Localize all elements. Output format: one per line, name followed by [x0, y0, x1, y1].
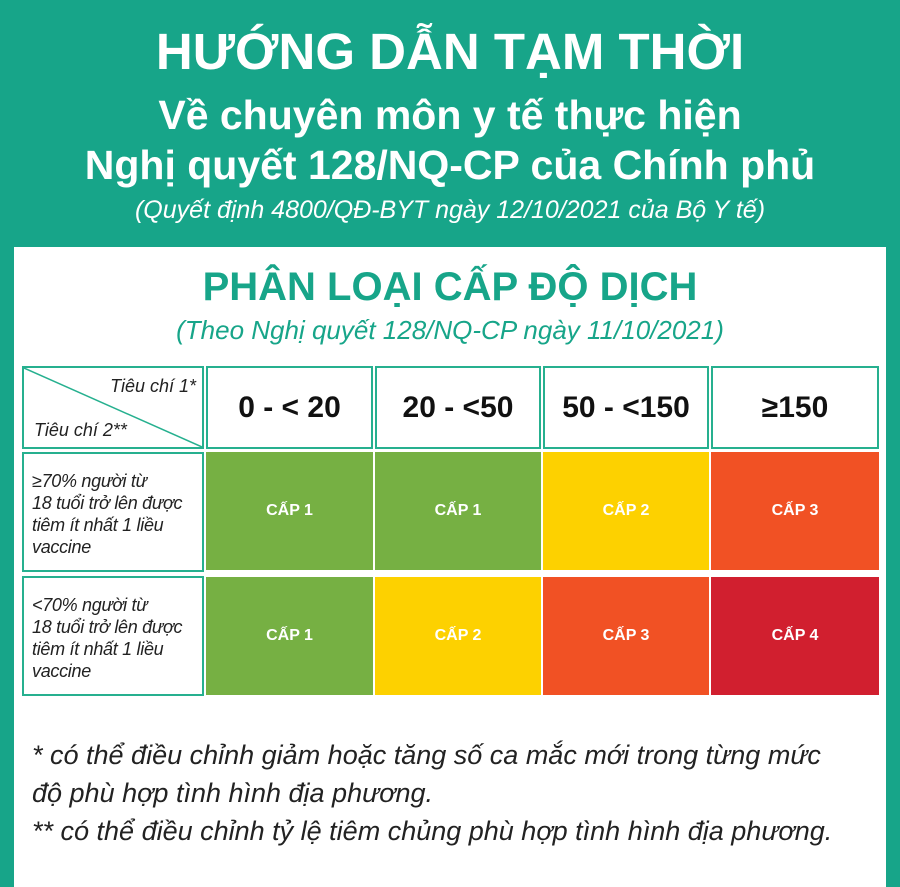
row 2 levels: CẤP 3: [603, 627, 649, 644]
row label 1: vaccine: [32, 537, 91, 557]
panel: classification: [14, 247, 886, 887]
header: 0-<20: 0 - < 20: [238, 390, 341, 424]
corner cell: Tiêu chí 2**: [34, 420, 127, 440]
row label 2: tiêm ít nhất 1 liều: [32, 639, 163, 659]
subtitle: Nghị quyết 128/NQ-CP của Chính phủ: [85, 142, 815, 188]
row label 1: tiêm ít nhất 1 liều: [32, 515, 163, 535]
table: [22, 366, 879, 696]
row label 1: ≥70% người từ: [32, 471, 147, 491]
header: 50-<150: [543, 366, 709, 449]
subtitle: [85, 92, 815, 188]
header: 50-<150: 50 - <150: [562, 390, 690, 424]
row 1 levels: CẤP 3: [772, 502, 818, 519]
corner cell: Tiêu chí 1*: [110, 376, 196, 396]
subtitle: Về chuyên môn y tế thực hiện: [158, 92, 742, 138]
header: >=150: [711, 366, 879, 449]
row 1 levels: CẤP 1: [435, 502, 481, 519]
row 1 levels: CẤP 2: [603, 502, 649, 519]
footnotes: [32, 740, 832, 846]
header: >=150: ≥150: [762, 390, 828, 424]
footnotes: * có thể điều chỉnh giảm hoặc tăng số ca mắc mới trong từng mức: [32, 740, 821, 770]
header: 20-<50: 20 - <50: [403, 390, 513, 424]
panel heading: PHÂN LOẠI CẤP ĐỘ DỊCH: [203, 265, 697, 309]
row label 2: <70% người từ: [32, 595, 147, 615]
source note: (Quyết định 4800/QĐ-BYT ngày 12/10/2021 của Bộ Y tế): [135, 196, 765, 224]
panel subheading: (Theo Nghị quyết 128/NQ-CP ngày 11/10/2021): [176, 315, 724, 345]
row label 2: 18 tuổi trở lên được: [32, 617, 182, 637]
footnotes: ** có thể điều chỉnh tỷ lệ tiêm chủng phù hợp tình hình địa phương.: [32, 816, 832, 846]
row 1 levels: CẤP 1: [266, 502, 313, 519]
row 2 levels: CẤP 4: [772, 627, 818, 644]
header: 0-<20: [206, 366, 373, 449]
row 1 levels: [206, 452, 879, 570]
row label 2: vaccine: [32, 661, 91, 681]
row label 1: [22, 452, 204, 572]
header: 20-<50: [375, 366, 541, 449]
row label 1: 18 tuổi trở lên được: [32, 493, 182, 513]
corner cell: [22, 366, 204, 449]
title: HƯỚNG DẪN TẠM THỜI: [156, 23, 744, 80]
footnotes: độ phù hợp tình hình địa phương.: [32, 778, 433, 808]
row label 2: [22, 576, 204, 696]
row 2 levels: CẤP 1: [266, 627, 313, 644]
row 2 levels: [206, 577, 879, 695]
row 2 levels: CẤP 2: [435, 627, 481, 644]
